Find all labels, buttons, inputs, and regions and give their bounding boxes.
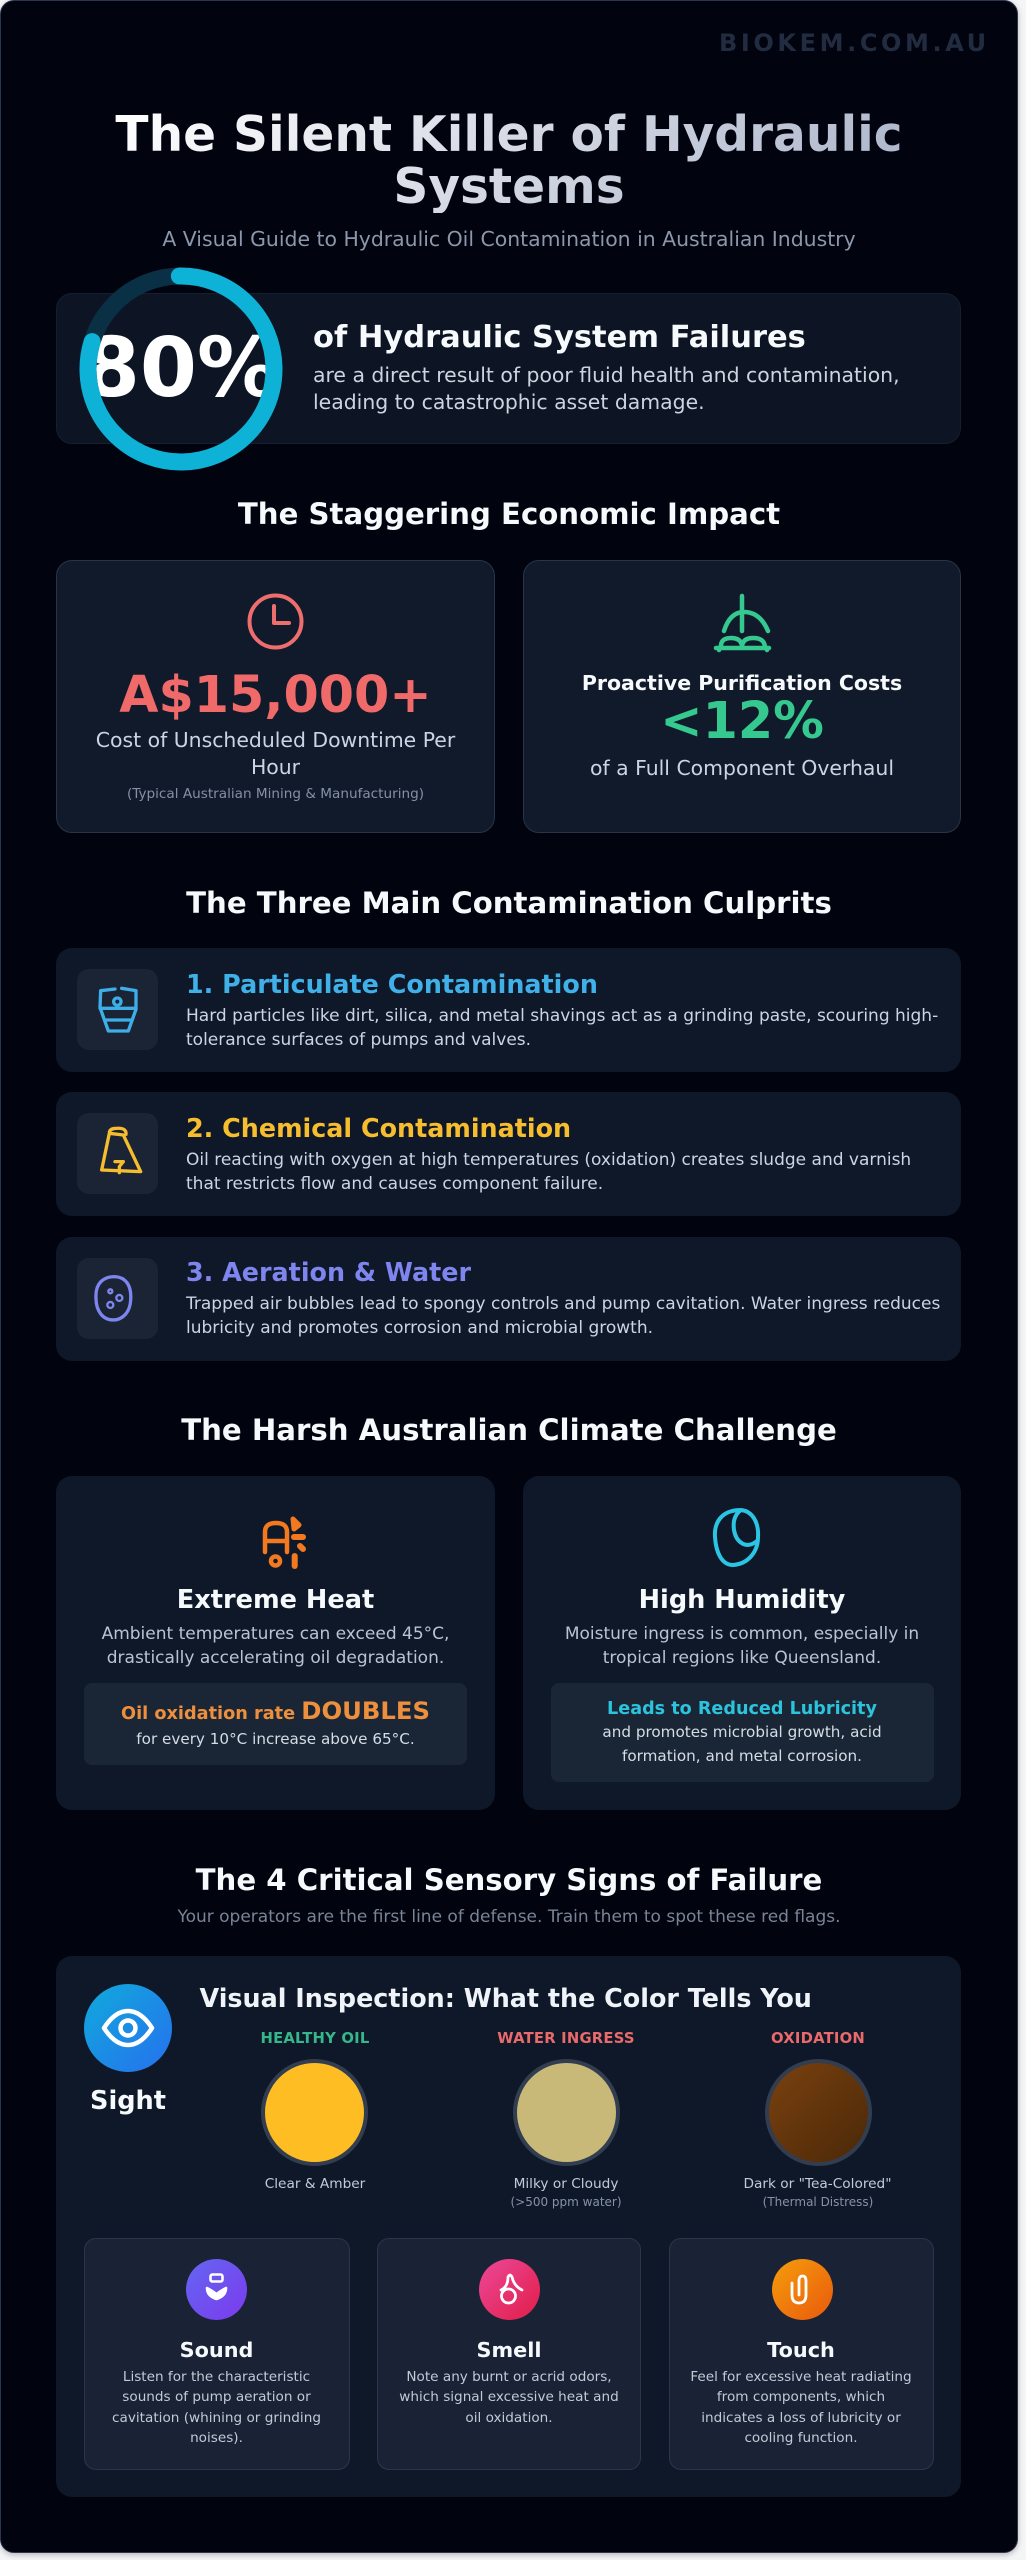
heading: culprits: The Three Main Contamination Culprits xyxy=(186,886,832,920)
lubricity statement: Leads to Reduced Lubricity xyxy=(607,1699,877,1719)
purification label: of a Full Component Overhaul xyxy=(590,756,894,780)
oil swatch: water xyxy=(512,2059,620,2166)
card: touch xyxy=(668,2238,934,2470)
icon: clock xyxy=(248,594,304,650)
sound text: Listen for the characteristic xyxy=(123,2369,310,2385)
heat text: drastically accelerating oil degradation. xyxy=(107,1648,444,1668)
oil label: water: WATER INGRESS xyxy=(497,2030,635,2047)
stat description: leading to catastrophic asset damage. xyxy=(313,390,705,414)
lubricity note xyxy=(602,1723,882,1765)
sensory subtitle: Your operators are the first line of defense. Train them to spot these red flags. xyxy=(177,1907,841,1927)
oil note: water: (>500 ppm water) xyxy=(510,2195,622,2209)
particulate text: Hard particles like dirt, silica, and metal shavings act as a grinding paste, scouring high- xyxy=(186,1006,938,1026)
oxidation statement: Oil oxidation rate DOUBLES xyxy=(121,1696,430,1725)
icon box: particulate xyxy=(77,969,158,1050)
particulate text xyxy=(186,1006,938,1050)
downtime note: (Typical Australian Mining & Manufacturing) xyxy=(127,786,424,802)
chemical title: 2. Chemical Contamination xyxy=(186,1112,571,1142)
panel: high humidity xyxy=(523,1476,961,1810)
sound text: sounds of pump aeration or xyxy=(122,2389,311,2405)
smell text: oil oxidation. xyxy=(465,2410,553,2426)
purification value: <12% xyxy=(660,691,824,750)
title: The Silent Killer of Hydraulic xyxy=(115,107,903,163)
purification heading: Proactive Purification Costs xyxy=(582,671,902,695)
touch text xyxy=(690,2369,912,2446)
subtitle: A Visual Guide to Hydraulic Oil Contamination in Australian Industry xyxy=(162,227,856,251)
donut ring 80% xyxy=(80,268,282,470)
oil label: oxidation: OXIDATION xyxy=(771,2030,865,2047)
icon: sight xyxy=(84,1984,172,2072)
heading: climate: The Harsh Australian Climate Challenge xyxy=(181,1413,837,1447)
icon: touch xyxy=(772,2259,832,2320)
panel: sensory signs xyxy=(56,1956,961,2497)
humidity text xyxy=(565,1624,919,1668)
brand watermark: BIOKEM.COM.AU xyxy=(719,29,990,57)
touch text: indicates a loss of lubricity or xyxy=(701,2410,901,2426)
oxidation note: for every 10°C increase above 65°C. xyxy=(136,1730,415,1748)
chemical text: that restricts flow and causes component failure. xyxy=(186,1174,603,1194)
icon box: aeration xyxy=(77,1258,158,1339)
panel: downtime cost xyxy=(56,560,495,833)
downtime label xyxy=(96,728,456,778)
icons: culprits xyxy=(94,986,142,1322)
particulate text: tolerance surfaces of pumps and valves. xyxy=(186,1030,531,1050)
heat text xyxy=(102,1624,449,1668)
aeration title: 3. Aeration & Water xyxy=(186,1256,471,1286)
icon: purification xyxy=(714,594,772,652)
icon: humidity xyxy=(712,1508,760,1567)
oil caption: water: Milky or Cloudy xyxy=(514,2176,618,2192)
oil caption: oxidation: Dark or "Tea-Colored" xyxy=(743,2176,892,2192)
smell title: Smell xyxy=(476,2338,542,2362)
humidity title: High Humidity xyxy=(639,1585,845,1615)
aeration text xyxy=(186,1294,940,1338)
downtime label: Hour xyxy=(251,754,300,778)
sight label: Sight xyxy=(90,2086,166,2116)
lubricity note: and promotes microbial growth, acid xyxy=(602,1723,882,1741)
visual inspection heading: Visual Inspection: What the Color Tells You xyxy=(200,1983,812,2013)
touch title: Touch xyxy=(767,2338,835,2362)
downtime label: Cost of Unscheduled Downtime Per xyxy=(96,728,455,752)
touch text: Feel for excessive heat radiating xyxy=(690,2369,912,2385)
touch text: from components, which xyxy=(717,2389,885,2405)
smell text xyxy=(399,2369,619,2426)
heat title: Extreme Heat xyxy=(177,1585,374,1615)
panel: aeration xyxy=(56,1237,961,1361)
card: sound xyxy=(84,2238,350,2470)
heading: sensory signs: The 4 Critical Sensory Signs of Failure xyxy=(196,1863,822,1897)
smell text: which signal excessive heat and xyxy=(399,2389,619,2405)
title xyxy=(115,109,903,213)
aeration text: lubricity and promotes corrosion and microbial growth. xyxy=(186,1318,653,1338)
icon: heat xyxy=(262,1516,306,1569)
oil swatch: oxidation xyxy=(764,2059,872,2166)
humidity text: tropical regions like Queensland. xyxy=(603,1648,881,1668)
stat description: are a direct result of poor fluid health and contamination, xyxy=(313,363,900,387)
icon: smell xyxy=(478,2259,540,2320)
oil swatch: healthy xyxy=(261,2059,368,2166)
card: smell xyxy=(377,2238,641,2470)
panel: particulate xyxy=(56,948,961,1072)
panel: chemical xyxy=(56,1092,961,1216)
chemical text: Oil reacting with oxygen at high temperatures (oxidation) creates sludge and varnish xyxy=(186,1150,911,1170)
callout: lubricity xyxy=(551,1683,934,1782)
sound text: cavitation (whining or grinding xyxy=(112,2410,321,2426)
panel: 80 percent stat xyxy=(56,293,961,444)
humidity text: Moisture ingress is common, especially in xyxy=(565,1624,919,1644)
smell text: Note any burnt or acrid odors, xyxy=(406,2369,612,2385)
title: Systems xyxy=(393,159,625,215)
stat number 80%: 80% xyxy=(83,321,279,416)
particulate title: 1. Particulate Contamination xyxy=(186,968,598,998)
chemical text xyxy=(186,1150,911,1194)
downtime value: A$15,000+ xyxy=(119,665,432,724)
stat heading: of Hydraulic System Failures xyxy=(313,320,806,355)
oil label: healthy: HEALTHY OIL xyxy=(261,2030,369,2047)
touch text: cooling function. xyxy=(744,2430,858,2446)
panel: purification cost xyxy=(523,560,961,833)
sound text xyxy=(112,2369,321,2446)
icon: sound xyxy=(186,2259,246,2320)
lubricity note: formation, and metal corrosion. xyxy=(622,1747,862,1765)
panel: extreme heat xyxy=(56,1476,495,1810)
stat description xyxy=(313,363,900,414)
sound title: Sound xyxy=(180,2338,253,2362)
aeration text: Trapped air bubbles lead to spongy controls and pump cavitation. Water ingress reduces xyxy=(186,1294,940,1314)
oil note: oxidation: (Thermal Distress) xyxy=(763,2195,873,2209)
oil caption: healthy: Clear & Amber xyxy=(265,2176,365,2192)
callout: oxidation xyxy=(84,1683,467,1765)
heading: economic impact: The Staggering Economic Impact xyxy=(238,497,780,531)
heat text: Ambient temperatures can exceed 45°C, xyxy=(102,1624,449,1644)
sound text: noises). xyxy=(190,2430,243,2446)
icon box: chemical xyxy=(77,1113,158,1194)
